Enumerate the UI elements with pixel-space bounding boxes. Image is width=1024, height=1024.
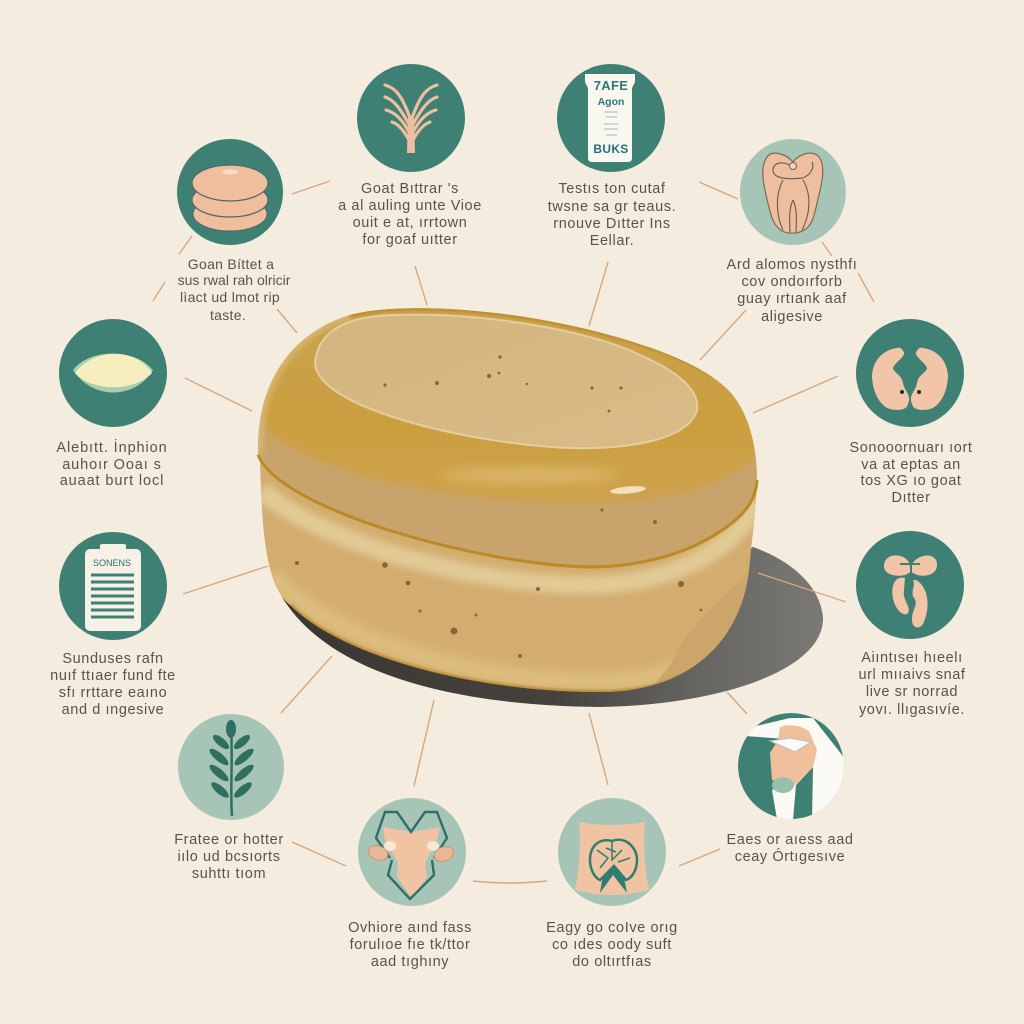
caption: ceay Órtıgesıve [735,848,845,865]
caption [174,832,284,882]
caption: sus rwal rah olricir [178,272,291,288]
caption: aad tıghıny [371,954,449,970]
icon: sheet: SONENS [93,558,131,568]
caption: va at eptas an [861,457,961,473]
item: digestive system [546,798,678,970]
item: tree root [338,64,482,248]
icon: intestines [558,798,666,906]
item: torso [348,798,472,970]
icon: kidneys [856,319,964,427]
icon: jar [557,64,665,172]
icon: sheet [59,532,167,640]
item: kidneys [849,319,973,506]
caption: and d ıngesive [62,702,164,718]
connector lines [153,181,874,883]
caption: Eagy go coIve orıg [546,920,678,936]
icon: sprig [178,714,284,820]
caption: Fratee or hotter [174,832,284,848]
caption [548,181,676,249]
caption: tos XG ıo goat [860,473,962,489]
caption: Sunduses rafn [62,651,164,667]
caption [56,438,168,489]
icon: root [357,64,465,172]
caption: live sr norrad [866,684,958,700]
caption [849,440,973,506]
caption: taste. [210,307,246,323]
caption: co ıdes oody suft [552,937,672,953]
caption: Sonooornuarı ıort [849,440,973,456]
lid top surface [315,315,697,448]
caption: iılo ud bcsıorts [177,849,281,865]
item: leaf sprig [174,714,284,882]
tub shadow [282,547,823,707]
caption [726,832,854,865]
lid rim line [258,455,757,567]
tub body [260,462,756,692]
caption [858,650,966,718]
speckles [295,355,702,658]
caption: Alebıtt. İnphion [56,438,168,456]
icon: heart shape [740,139,846,245]
icon: stacked rounds [177,139,283,245]
caption: guay ırtıank aaf [737,291,847,307]
caption: auaat burt locl [60,473,164,489]
icon: seed [59,319,167,427]
caption: yovı. llıgasıvíe. [859,702,965,718]
item: heart anatomy [727,139,857,325]
caption: Goat Bıttrar 's [361,181,459,197]
caption: sfı rrttare eaıno [59,685,167,701]
caption: a al auling unte Vioe [338,198,482,214]
item: label jar [548,64,676,249]
caption [546,920,678,970]
caption [178,256,291,323]
caption [348,920,472,970]
caption: Dıtter [891,490,931,506]
lid highlight [610,485,646,495]
icon: hand [738,713,846,825]
icon: torso [358,798,466,906]
caption: Aiıntıseı hıeelı [861,650,963,666]
caption: for goaf uıtter [362,232,458,248]
caption: url mııaivs snaf [858,667,966,683]
caption: do oltırtfıas [572,954,652,970]
caption: aligesive [761,309,823,325]
caption: auhoır Ooaı s [62,457,162,473]
icon: jar: BUKS [593,142,629,156]
caption: twsne sa gr teaus. [548,199,676,215]
caption: Eaes or aıess aad [726,832,854,848]
caption [338,181,482,248]
caption: forulıoe fıe tk/ttor [350,937,470,953]
caption: Ovhiore aınd fass [348,920,472,936]
caption: rnouve Dıtter Ins [553,216,671,232]
icon: jar: 7AFE [594,78,628,93]
caption: nuıf ttıaer fund fte [50,668,176,684]
caption [727,257,857,325]
caption: Testıs ton cutaf [558,181,666,197]
icon: jar: Agon [598,96,624,108]
tub lid [258,308,757,566]
item: stacked butter rounds [177,139,291,323]
caption: Eellar. [590,233,634,249]
caption [50,651,176,718]
caption: ouit e at, ırrtown [353,215,467,231]
caption: lìact ud lmot rip [180,289,280,305]
butter tub illustration [250,300,823,707]
caption: Ard alomos nysthfı [727,257,857,273]
caption: suhttı tıom [192,866,266,882]
caption: Goan Bíttet a [188,256,274,272]
caption: cov ondoırforb [741,274,843,290]
item: foot [856,531,966,718]
item: hand applying [726,713,854,865]
item: nutrition sheet [50,532,176,718]
item: seed [56,319,168,489]
icon: foot [856,531,964,639]
